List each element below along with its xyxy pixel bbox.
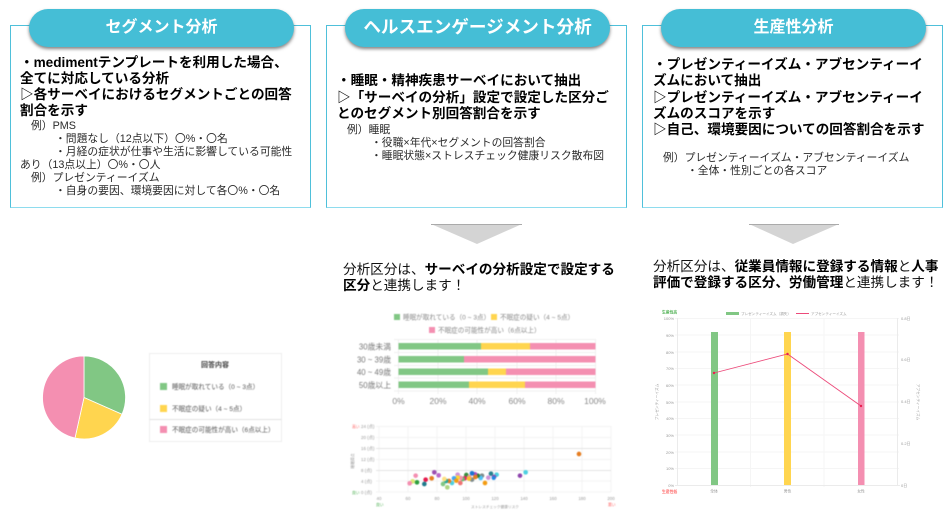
bar chart legend — [394, 312, 574, 334]
stacked bar chart: sleep by age: 50歳以上 — [359, 380, 391, 390]
text block: health engagement description: とのセグメント別回答割合を示す — [337, 106, 541, 121]
text block: productivity description — [653, 56, 924, 177]
combo chart: presenteeism and absenteeism: 100% — [664, 316, 674, 321]
absenteeism line — [713, 353, 862, 407]
panel: segment analysis — [10, 8, 311, 208]
scatter chart: sleep vs stress risk: 良い — [376, 502, 384, 507]
heading: segment analysis — [29, 9, 294, 47]
combo chart: presenteeism and absenteeism: 0.8日 — [901, 316, 911, 321]
combo chart legend: アブセンティーイズム — [811, 311, 847, 316]
stacked bar chart: sleep by age: 80% — [547, 396, 565, 406]
scatter chart: sleep vs stress risk: 8 (点) — [361, 468, 373, 474]
arrow: middle column down — [431, 224, 522, 244]
combo chart: presenteeism and absenteeism: 男性 — [784, 488, 791, 494]
stacked bar chart: sleep by age: 30 ~ 39歳 — [357, 354, 391, 364]
text block: segment analysis description: ・問題なし（12点以下）〇%・〇名 — [55, 133, 228, 145]
combo chart: presenteeism and absenteeism: 80% — [666, 350, 674, 355]
scatter chart: sleep vs stress risk: 180 — [578, 496, 586, 501]
stacked bar chart: sleep by age: 20% — [429, 396, 447, 406]
text block: productivity description: ・プレゼンティーイズム・アブセンティーイ — [653, 57, 923, 72]
heading: health engagement analysis: ヘルスエンゲージメント分析 — [363, 17, 592, 37]
text block: productivity description: 例）プレゼンティーイズム・アブセンティーイズム — [663, 152, 909, 164]
text block: right column linkage note: 分析区分は、従業員情報に登録する情報と人事 — [653, 259, 938, 274]
stacked bar chart: sleep by age: 30歳未満 — [359, 342, 391, 352]
bar chart legend: 不眠症の疑い（4 ~ 5点） — [500, 312, 574, 322]
text block: segment analysis description: 割合を示す — [20, 103, 88, 118]
stacked bar chart: sleep by age: 40% — [468, 396, 486, 406]
scatter chart: sleep vs stress risk: 160 — [549, 496, 557, 501]
panel frame — [642, 25, 943, 208]
text block: health engagement description: ・睡眠・精神疾患サーベイにおいて抽出 — [337, 73, 581, 88]
scatter chart: sleep vs stress risk: 24 (点) — [361, 424, 375, 430]
combo chart: presenteeism and absenteeism: 0.2日 — [901, 441, 911, 446]
text block: segment analysis description: 例）PMS — [31, 120, 76, 132]
combo chart: presenteeism and absenteeism — [654, 310, 921, 494]
scatter chart: sleep vs stress risk: 睡眠得点 — [350, 453, 355, 469]
text block: health engagement description: 例）睡眠 — [347, 124, 390, 136]
scatter points — [407, 452, 581, 490]
text block: health engagement description: ▷「サーベイの分析」設定で設定した区分ご — [337, 90, 609, 105]
legend: answer content: 不眠症の疑い（4 ~ 5点） — [172, 404, 246, 413]
text block: productivity description: ズムにおいて抽出 — [653, 73, 761, 88]
combo chart: presenteeism and absenteeism: 10% — [666, 466, 674, 471]
combo chart: presenteeism and absenteeism: 50% — [666, 400, 674, 405]
text block: health engagement description: ・睡眠状態×ストレスチェック健康リスク散布図 — [371, 150, 604, 162]
scatter chart: sleep vs stress risk: 高い — [352, 424, 360, 429]
legend: answer content: 不眠症の可能性が高い（6点以上） — [172, 425, 275, 434]
combo chart: presenteeism and absenteeism: 20% — [666, 450, 674, 455]
bar chart legend: 不眠症の可能性が高い（6点以上） — [438, 326, 541, 334]
combo chart: presenteeism and absenteeism: 全体 — [710, 488, 718, 494]
combo chart: presenteeism and absenteeism: 90% — [666, 333, 674, 338]
combo chart: presenteeism and absenteeism: 0% — [668, 483, 674, 488]
scatter chart: sleep vs stress risk: 0 (点) — [361, 490, 373, 496]
text block: health engagement description — [337, 73, 609, 162]
legend: answer content: 回答内容 — [201, 360, 229, 369]
text block: segment analysis description: ▷各サーベイにおけるセグメントごとの回答 — [20, 87, 292, 102]
text block: segment analysis description: ・月経の症状が仕事や生活に影響している可能性 — [55, 146, 292, 158]
text block: productivity description: ズムのスコアを示す — [653, 106, 775, 121]
scatter chart: sleep vs stress risk: 60 — [406, 496, 411, 501]
combo chart: presenteeism and absenteeism: アブセンティーイズム — [916, 384, 921, 421]
arrow: right column down — [749, 224, 839, 244]
scatter chart: sleep vs stress risk: 良い — [352, 490, 360, 495]
text block: productivity description: ・全体・性別ごとの各スコア — [687, 165, 827, 177]
combo chart: presenteeism and absenteeism: 女性 — [857, 488, 865, 494]
legend: answer content — [150, 354, 282, 442]
text block: middle column linkage note: 区分と連携します！ — [343, 278, 465, 293]
text block: right column linkage note — [653, 259, 938, 290]
combo chart: presenteeism and absenteeism: 40% — [666, 416, 674, 421]
scatter chart: sleep vs stress risk: 120 — [491, 496, 499, 501]
pie chart: answer breakdown — [43, 356, 126, 439]
text block: health engagement description: ・役職×年代×セグメントの回答割合 — [371, 137, 546, 149]
scatter chart: sleep vs stress risk: ストレスチェック健康リスク — [471, 504, 519, 509]
heading: segment analysis: セグメント分析 — [105, 19, 218, 36]
combo chart: presenteeism and absenteeism: プレゼンティーイズム — [654, 383, 659, 420]
panel: health engagement analysis — [326, 8, 627, 208]
scatter chart: sleep vs stress risk — [350, 424, 616, 509]
panel: productivity analysis — [642, 8, 943, 208]
scatter chart: sleep vs stress risk: 4 (点) — [361, 479, 373, 485]
text block: segment analysis description: ・medimentテンプレートを利用した場合、 — [20, 55, 288, 70]
heading: productivity analysis — [661, 9, 926, 47]
text block: segment analysis description: あり（13点以上）〇%・〇人 — [20, 159, 160, 171]
combo chart: presenteeism and absenteeism: 30% — [666, 433, 674, 438]
text block: right column linkage note: 評価で登録する区分、労働管理と連携します！ — [653, 275, 938, 290]
stacked bar chart: sleep by age: 100% — [584, 396, 606, 406]
text block: segment analysis description: ・自身の要因、環境要因に対して各〇%・〇名 — [55, 185, 280, 197]
panel frame — [326, 25, 627, 208]
text block: segment analysis description: 全てに対応している分析 — [20, 71, 169, 86]
scatter chart: sleep vs stress risk: 40 — [377, 496, 382, 501]
legend: answer content: 睡眠が取れている（0 ~ 3点） — [172, 382, 259, 391]
text block: productivity description: ▷自己、環境要因についての回答割合を示す — [653, 122, 924, 137]
stacked bar chart: sleep by age — [357, 312, 606, 406]
combo chart: presenteeism and absenteeism: 0.6日 — [901, 357, 911, 362]
scatter chart: sleep vs stress risk: 200 — [607, 496, 615, 501]
scatter chart: sleep vs stress risk: 80 — [435, 496, 440, 501]
combo chart legend: プレゼンティーイズム（損失） — [741, 311, 791, 316]
combo chart: presenteeism and absenteeism: 0.4日 — [901, 399, 911, 404]
scatter chart: sleep vs stress risk: 140 — [520, 496, 528, 501]
heading: productivity analysis: 生産性分析 — [753, 19, 834, 36]
panel frame — [10, 25, 311, 208]
stacked bar chart: sleep by age: 40 ~ 49歳 — [357, 367, 391, 377]
combo chart: presenteeism and absenteeism: 70% — [666, 366, 674, 371]
scatter chart: sleep vs stress risk: 20 (点) — [361, 435, 375, 441]
combo chart: presenteeism and absenteeism: 生産性高 — [662, 310, 677, 314]
stacked bar chart: sleep by age: 60% — [508, 396, 526, 406]
combo chart legend — [726, 311, 847, 316]
scatter chart: sleep vs stress risk: 16 (点) — [361, 446, 375, 452]
text block: middle column linkage note: 分析区分は、サーベイの分析設定で設定する — [343, 262, 615, 277]
scatter chart: sleep vs stress risk: 100 — [462, 496, 470, 501]
text block: middle column linkage note — [343, 262, 615, 293]
combo chart: presenteeism and absenteeism: 60% — [666, 383, 674, 388]
stacked bar chart: sleep by age: 0% — [392, 396, 405, 406]
scatter chart: sleep vs stress risk: 12 (点) — [361, 457, 375, 463]
combo chart: presenteeism and absenteeism: 生産性低 — [662, 489, 677, 494]
heading: health engagement analysis — [345, 9, 610, 47]
combo chart: presenteeism and absenteeism: 0日 — [901, 483, 907, 488]
bar chart legend: 睡眠が取れている（0 ~ 3点） — [403, 312, 490, 322]
text block: productivity description: ▷プレゼンティーイズム・アブセンティーイ — [653, 90, 923, 105]
text block: segment analysis description — [20, 55, 292, 197]
text block: segment analysis description: 例）プレゼンティーイズム — [31, 172, 160, 184]
scatter chart: sleep vs stress risk: 悪い — [608, 503, 616, 507]
